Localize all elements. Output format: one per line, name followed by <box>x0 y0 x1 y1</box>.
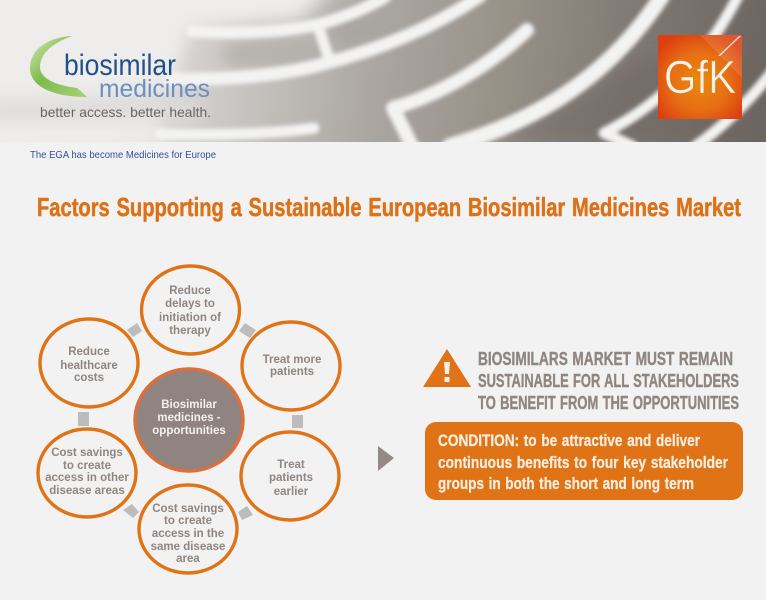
circle: Reduce delays to initiation of therapy <box>142 266 240 354</box>
circle: Cost savings other disease areas: access in other <box>45 472 129 484</box>
circle: Reduce delays to initiation of therapy: delays to <box>165 298 215 310</box>
circle: Treat more patients: patients <box>270 366 314 378</box>
circle: Cost savings other disease areas: to create <box>63 460 111 472</box>
logo: biosimilar medicines <box>30 36 211 120</box>
center circle: Biosimilar medicines opportunities: opportunities <box>152 425 226 437</box>
circle: Cost savings same disease area: same disease <box>151 541 225 553</box>
circle: Cost savings same disease area: area <box>176 553 200 565</box>
logo word biosimilar: biosimilar <box>64 49 176 82</box>
note: EGA has become Medicines for Europe: The EGA has become Medicines for Europe <box>30 149 216 161</box>
arrow <box>378 446 394 471</box>
logo tagline: better access. better health. <box>40 104 211 120</box>
center circle: Biosimilar medicines opportunities <box>135 369 243 471</box>
icon: warning triangle <box>423 349 471 387</box>
circle: Treat more patients <box>242 322 340 410</box>
circle: Cost savings other disease areas: Cost savings <box>51 447 123 459</box>
circle: Treat patients earlier: patients <box>269 472 313 484</box>
circle: Reduce healthcare costs: costs <box>74 372 104 384</box>
circle: Cost savings other disease areas: disease areas <box>49 485 125 497</box>
circle: Reduce delays to initiation of therapy: Reduce <box>169 285 211 297</box>
logo: GfK: GfK <box>664 51 736 103</box>
condition callout <box>425 422 743 500</box>
logo: GfK <box>658 35 742 119</box>
circle: Treat patients earlier: Treat <box>277 459 305 471</box>
warning heading <box>478 348 739 413</box>
circle: Cost savings same disease area: Cost savings <box>152 503 224 515</box>
circle: Cost savings other disease areas <box>38 429 136 517</box>
condition callout: groups in both the short and long term <box>438 474 694 493</box>
circle: Reduce healthcare costs <box>40 319 138 407</box>
circle: Cost savings same disease area <box>139 485 237 573</box>
connectors between circles <box>78 323 303 520</box>
circle: Treat patients earlier <box>241 432 339 520</box>
condition callout: CONDITION: to be attractive and deliver <box>438 431 700 450</box>
circle: Treat patients earlier: earlier <box>274 486 309 498</box>
cycle diagram: opportunities <box>38 266 340 573</box>
circle: Reduce healthcare costs: healthcare <box>60 360 118 372</box>
circle: Cost savings same disease area: to create <box>164 515 212 527</box>
center circle: Biosimilar medicines opportunities: medicines - <box>157 412 221 424</box>
circle: Treat more patients: Treat more <box>263 354 321 366</box>
circle: Reduce healthcare costs: Reduce <box>68 346 110 358</box>
header photo banner <box>0 0 766 150</box>
circle: Reduce delays to initiation of therapy: initiation of <box>159 312 221 324</box>
logo word medicines: medicines <box>99 75 210 103</box>
center circle: Biosimilar medicines opportunities: Biosimilar <box>161 399 217 411</box>
circle: Cost savings same disease area: access in the <box>152 528 224 540</box>
circle: Reduce delays to initiation of therapy: therapy <box>169 325 211 337</box>
icon: green crescent <box>30 36 87 97</box>
